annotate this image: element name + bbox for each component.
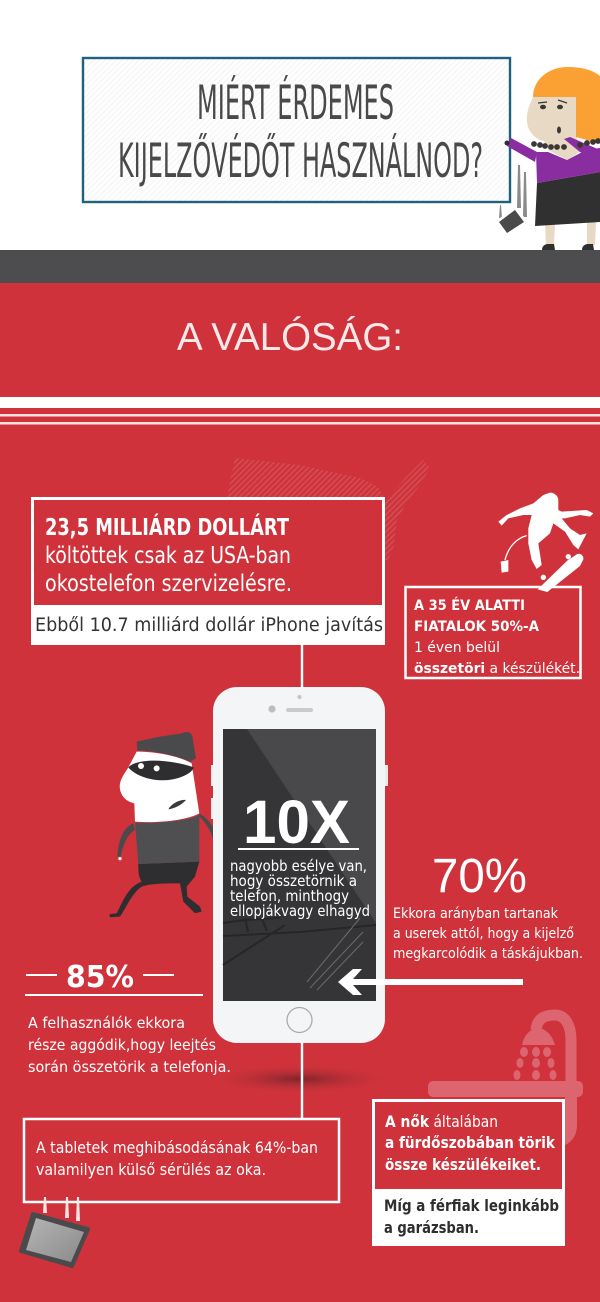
white stripes	[0, 397, 600, 424]
women line 3: össze készülékeiket.	[385, 1155, 541, 1174]
woman character	[504, 67, 600, 250]
10x caption line 4: ellopjákvagy elhagyd	[230, 902, 370, 920]
10x number: 10X	[243, 788, 350, 856]
under 35 line 4: összetöri a készülékét.	[414, 661, 580, 677]
under 35 line 2: FIATALOK 50%-A	[414, 619, 540, 635]
dark floor band	[0, 250, 600, 283]
panel: tablets	[24, 1119, 339, 1202]
falling phone icon	[495, 165, 529, 237]
usa cost body line 1: költöttek csak az USA-ban	[45, 543, 291, 569]
stat: 85 percent	[25, 960, 231, 1076]
lower connector	[301, 1042, 303, 1120]
usa cost headline: 23,5 MILLIÁRD DOLLÁRT	[45, 513, 289, 541]
85 percent dashes and rule	[25, 975, 203, 995]
women line 2: a fürdőszobában törik	[385, 1133, 555, 1152]
70 percent body	[393, 906, 583, 962]
10x caption	[230, 857, 370, 920]
women line 1: A nők általában	[385, 1112, 498, 1131]
heading: a valóság: A VALÓSÁG:	[177, 316, 403, 359]
panel: under 35	[406, 587, 580, 678]
stat: 85 percent: 85%	[66, 960, 134, 995]
connector lines to phone	[301, 644, 303, 688]
under 35 line 3: 1 éven belül	[414, 640, 500, 656]
tablets line 2: valamilyen külső sérülés az oka.	[36, 1160, 266, 1179]
phone	[211, 687, 388, 1043]
stat: 70 percent	[393, 850, 583, 962]
thief character	[109, 732, 215, 917]
phone ground shadow	[205, 1064, 395, 1094]
shower icon	[428, 1015, 583, 1145]
10x caption line 2: hogy összetörnik a	[230, 872, 357, 890]
10x underline	[238, 848, 359, 850]
85 percent line 2: része aggódik,hogy leejtés	[28, 1036, 216, 1054]
title line 1: MIÉRT ÉRDEMES	[197, 76, 394, 131]
85 percent body	[28, 1014, 231, 1076]
85 percent line 3: során összetörik a telefonja.	[28, 1058, 231, 1076]
tablet icon	[21, 1197, 88, 1266]
10x caption line 3: telefon, minthogy	[230, 887, 349, 905]
85 percent body: A felhasználók ekkora	[28, 1014, 185, 1032]
usa cost body line 2: okostelefon szervizelésre.	[45, 571, 292, 597]
10x caption: nagyobb esélye van,	[230, 857, 367, 875]
header background	[0, 0, 600, 250]
skater icon	[498, 493, 593, 592]
red main background	[0, 283, 600, 1302]
USA map hatched	[227, 458, 430, 560]
phone home button	[287, 1008, 312, 1032]
iphone note: Ebből 10.7 milliárd dollár iPhone javítás	[35, 615, 383, 636]
panel: usa cost	[31, 497, 385, 645]
phone screen	[223, 729, 376, 1001]
panel: women and men	[372, 1099, 565, 1246]
title box	[83, 58, 510, 202]
men line 1: Míg a férfiak leginkább	[384, 1196, 559, 1215]
phone speaker and camera	[268, 695, 313, 713]
arrow into phone	[338, 969, 523, 995]
men line 2: a garázsban.	[384, 1218, 479, 1237]
stat: 70 percent: 70%	[432, 850, 527, 903]
70 percent body: Ekkora arányban tartanak	[393, 906, 559, 922]
panel: under 35: A 35 ÉV ALATTI	[414, 597, 525, 614]
70 percent line 2: a userek attól, hogy a kijelző	[393, 926, 574, 942]
panel: tablets: A tabletek meghibásodásának 64%-ban	[36, 1138, 318, 1157]
